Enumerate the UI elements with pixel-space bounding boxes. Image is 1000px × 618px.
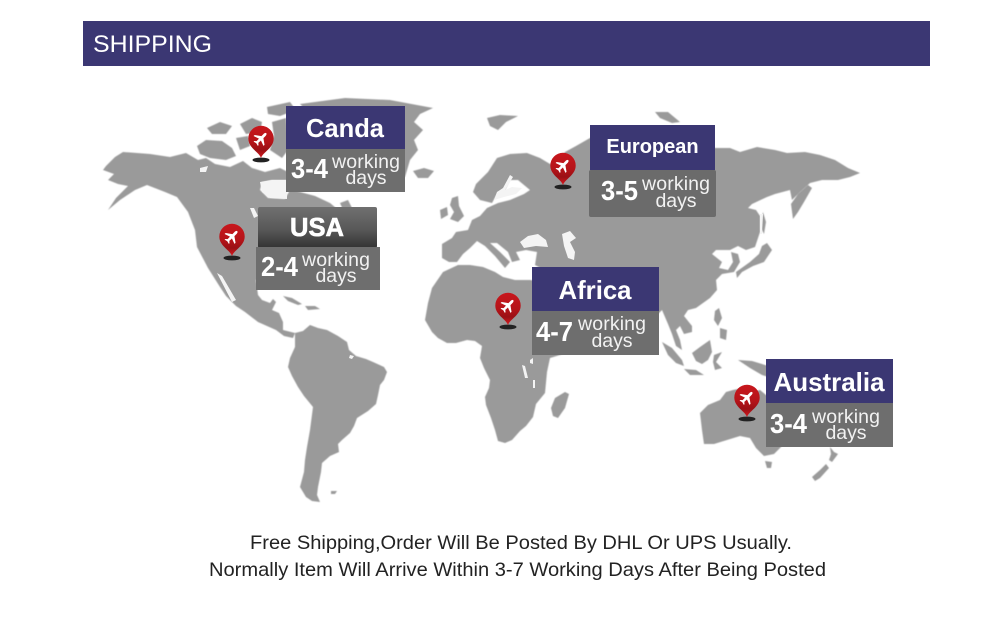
label: USA: working [301,249,370,271]
Caribbean [283,296,302,305]
label: European: days [656,190,697,212]
Tanganyika [522,365,528,378]
label: USA: days [316,265,357,287]
label: Africa: working [577,313,646,335]
Borneo [692,340,712,364]
Philippines [714,308,722,326]
Great Bear Lake [200,166,208,172]
label: Africa: days [592,330,633,352]
label: Australia: working [811,406,880,428]
label: USA: USA [290,212,344,242]
label: Canada: working [331,151,400,173]
Sea of Okhotsk inlet [760,214,763,234]
heading: SHIPPING [93,31,212,58]
Java [684,369,704,375]
Eurasia [442,130,860,350]
header bar [83,21,930,66]
Australia [700,388,786,456]
footer text: Normally Item Will Arrive Within 3-7 Working Days After Being Posted [209,559,826,581]
Madagascar [551,392,569,418]
pin: Africa [495,293,521,329]
footer text: Free Shipping,Order Will Be Posted By DHL Or UPS Usually. [250,532,792,554]
pin: USA [219,224,245,260]
label: European: working [641,173,710,195]
label: Australia [766,359,893,447]
New Zealand [829,447,838,462]
label: Australia: days [826,422,867,444]
Malawi [533,380,535,388]
label: Africa [532,267,659,355]
Greenland [300,98,433,178]
Tasmania [765,461,772,468]
label: European: European [606,136,699,158]
Sulawesi [713,352,722,370]
label: Canada [286,106,405,192]
label: Africa: 4-7 [536,316,573,347]
pin: Canada [248,126,274,162]
label: Australia: 3-4 [770,408,807,439]
Great Lakes [250,208,258,218]
label: Canada: Canda [306,113,385,143]
label: USA: 2-4 [261,251,298,282]
label: Canada: 3-4 [291,153,328,184]
label: USA [256,207,380,290]
pin: Europe [550,153,576,189]
Sumatra [662,342,684,366]
Iceland [413,168,434,178]
label: European [589,125,716,217]
pin: Australia [734,385,760,421]
Svalbard [487,115,518,130]
label: Australia: Australia [774,367,885,397]
Novaya Zemlya [655,112,680,123]
New Guinea [738,360,788,380]
Sakhalin [761,212,766,234]
Hudson Bay [260,180,287,199]
Japan [736,243,772,278]
label: Africa: Africa [558,275,632,305]
Britain and Ireland [450,196,464,222]
North America [103,152,345,338]
Caspian Sea [562,231,576,260]
Kamchatka [791,185,812,219]
Gulf of California [217,273,236,302]
footer text [209,532,826,581]
Africa [425,265,598,443]
Victoria Lake [530,358,533,364]
Newfoundland [340,200,352,212]
label: European: 3-5 [601,175,638,206]
Arctic islands [197,140,236,160]
Baltic Sea [494,175,522,200]
Falklands [331,491,337,494]
label: Canada: days [346,167,387,189]
Amazon mouth [349,355,354,359]
South America [288,325,387,502]
Black Sea [520,234,548,248]
world map [103,98,860,502]
inland seas and lakes [200,166,763,388]
